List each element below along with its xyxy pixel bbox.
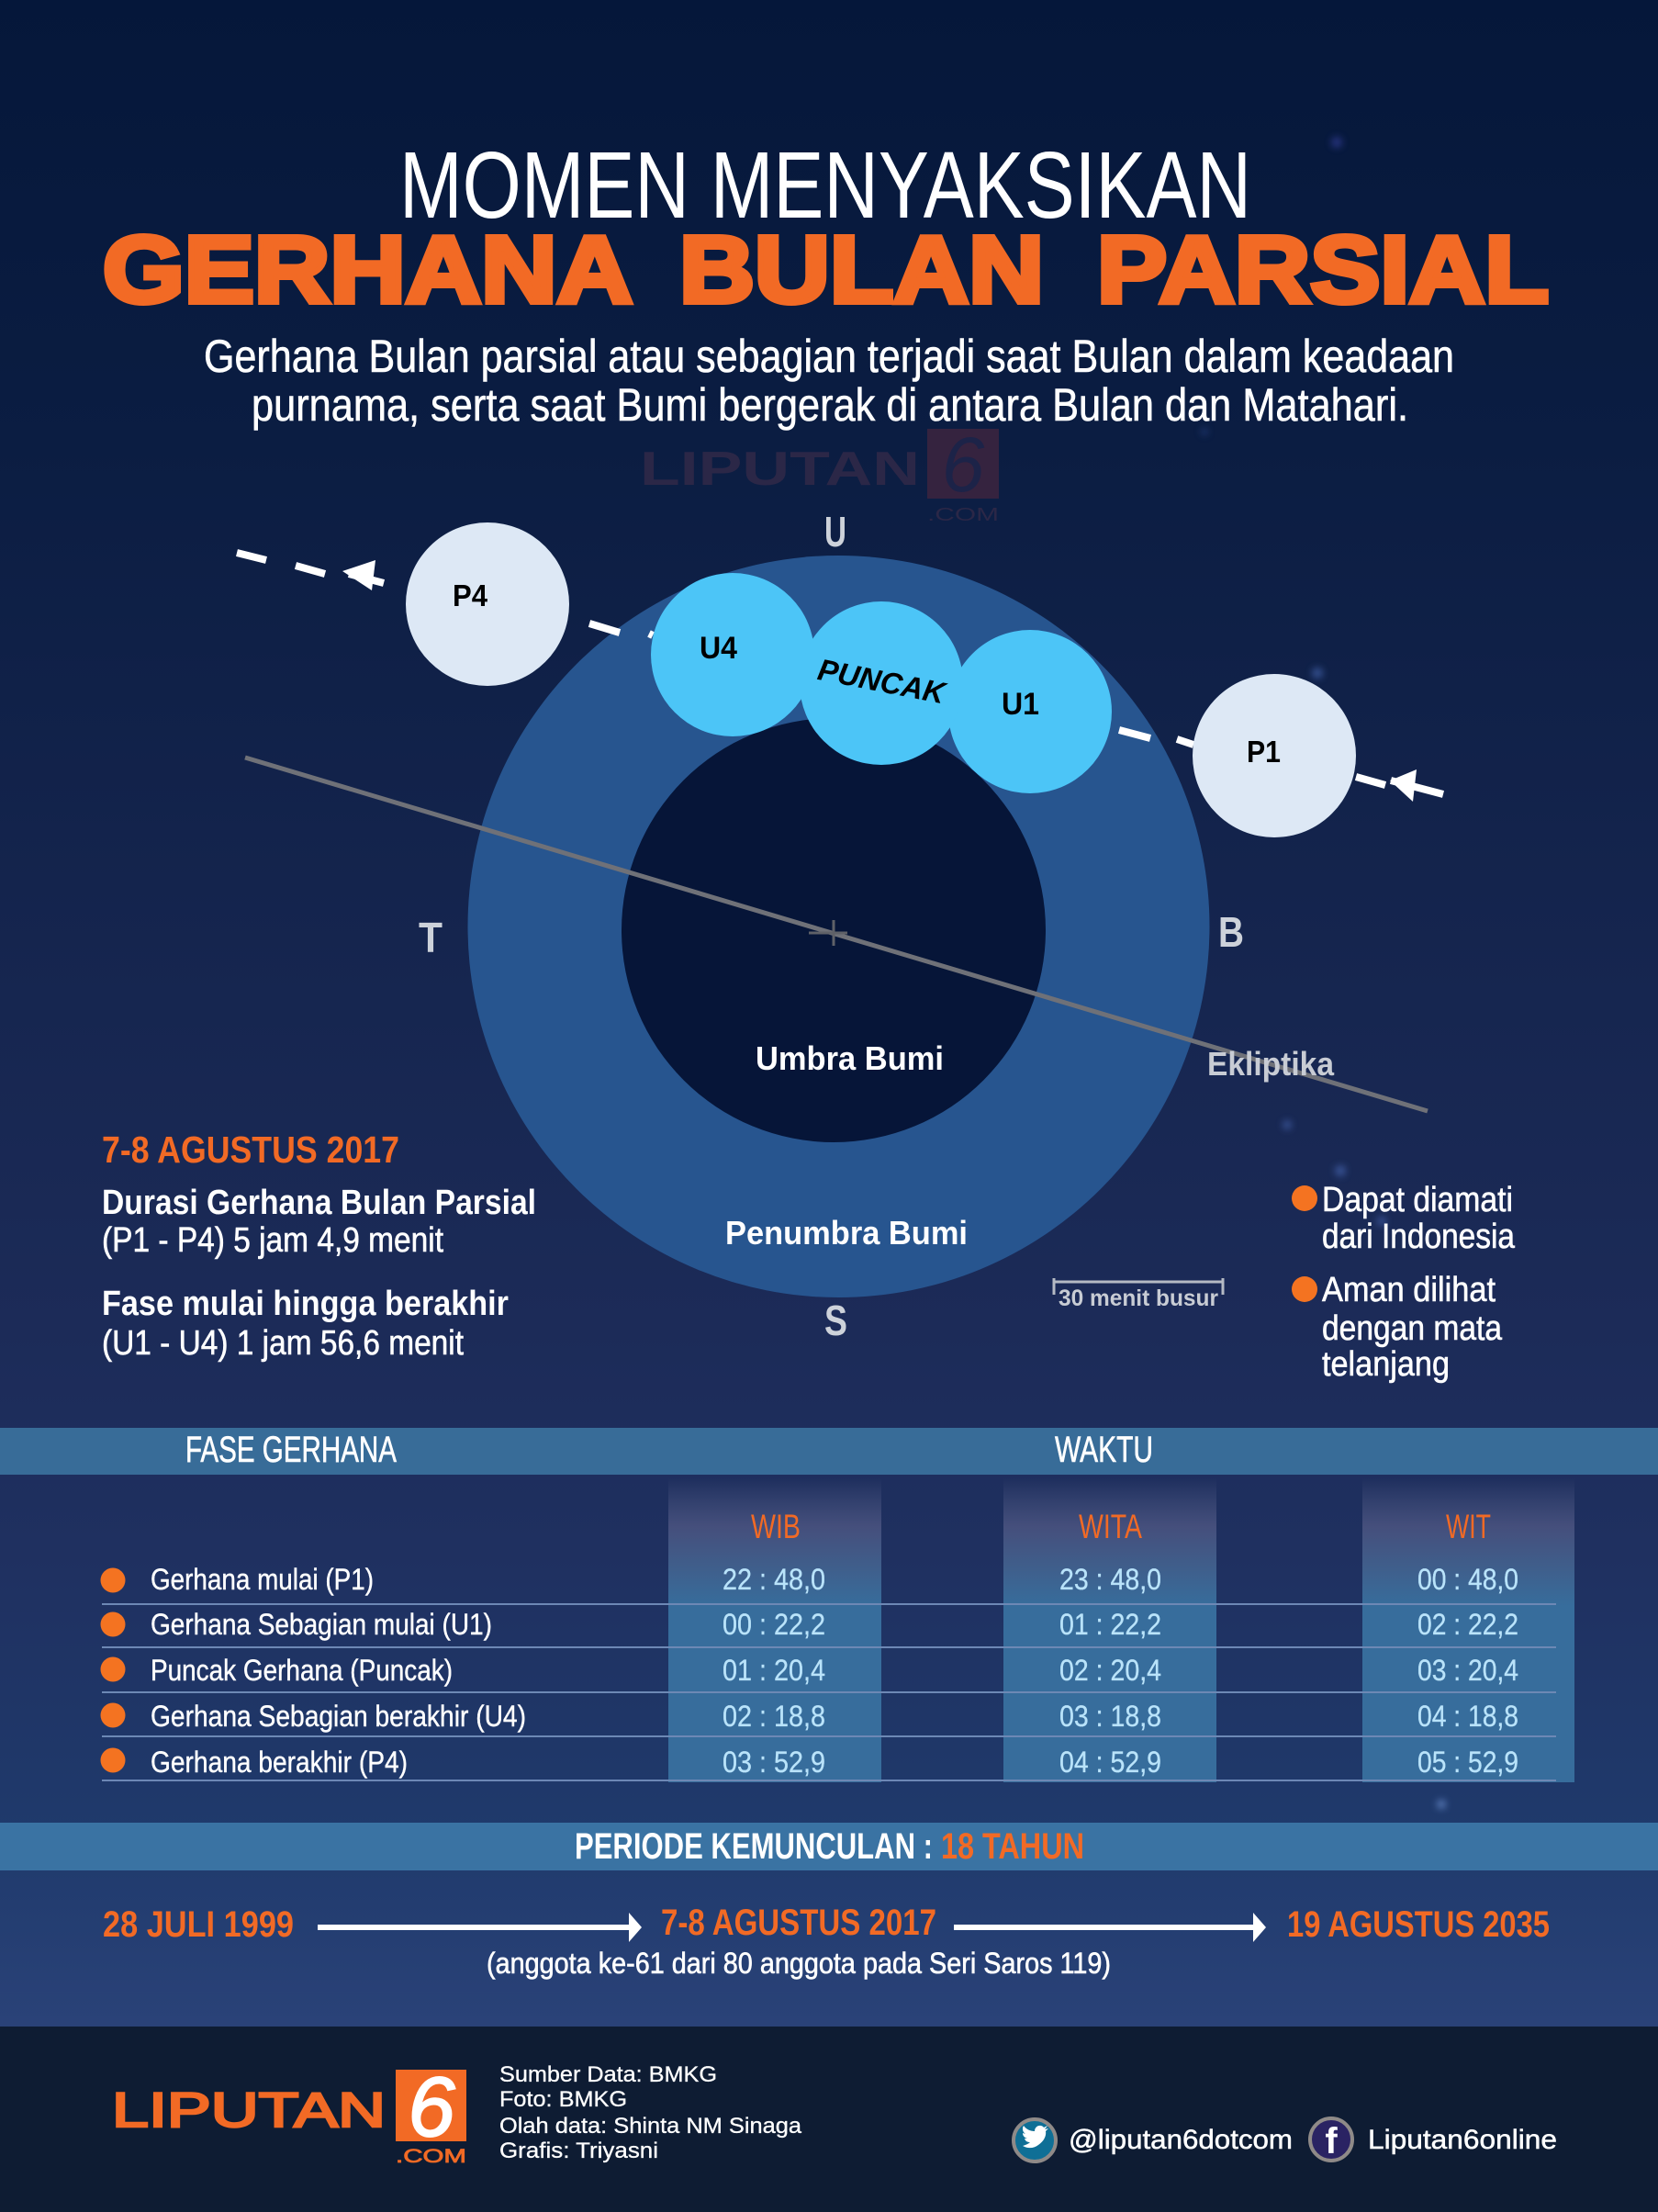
time zone headers — [751, 1508, 1491, 1545]
row: gerhana berakhir: 03 : 52,9 — [723, 1746, 825, 1779]
moon P4: P4 — [453, 578, 488, 612]
title: GERHANA — [103, 217, 633, 322]
row: gerhana mulai: 00 : 48,0 — [1417, 1563, 1518, 1596]
row: gerhana berakhir: 04 : 52,9 — [1059, 1746, 1161, 1779]
title — [103, 132, 1549, 322]
direction letters: S — [824, 1297, 847, 1344]
row: puncak: Puncak Gerhana (Puncak) — [151, 1654, 453, 1687]
viewing notes: Dapat diamati — [1322, 1181, 1513, 1219]
title: PARSIAL — [1097, 217, 1549, 322]
intro text: Gerhana Bulan parsial atau sebagian terjadi saat Bulan dalam keadaan — [204, 331, 1454, 382]
arrow 2 — [954, 1913, 1266, 1942]
time zone headers: WIT — [1446, 1508, 1491, 1545]
period band: PERIODE KEMUNCULAN : — [575, 1826, 933, 1867]
row: gerhana mulai: Gerhana mulai (P1) — [151, 1563, 374, 1596]
intro text: purnama, serta saat Bumi bergerak di antara Bulan dan Matahari. — [252, 379, 1408, 431]
row: sebagian berakhir — [101, 1700, 1518, 1733]
date and duration block: 7-8 AGUSTUS 2017 — [102, 1128, 399, 1171]
scale bar: 30 menit busur — [1059, 1286, 1218, 1311]
period band: 18 TAHUN — [941, 1826, 1084, 1867]
center cross — [809, 920, 847, 946]
row: gerhana berakhir: 05 : 52,9 — [1417, 1746, 1518, 1779]
logo: 6 — [408, 2060, 455, 2154]
intro text — [204, 331, 1454, 431]
penumbra label: Penumbra Bumi — [725, 1214, 968, 1252]
starfield — [1201, 137, 1446, 1809]
row: puncak: 03 : 20,4 — [1417, 1654, 1518, 1687]
period band — [0, 1823, 1658, 1870]
arrow 1 — [318, 1913, 642, 1942]
time zone headers: WIB — [751, 1508, 801, 1545]
row: puncak: 01 : 20,4 — [723, 1654, 825, 1687]
viewing notes: dari Indonesia — [1322, 1218, 1516, 1256]
row: puncak: 02 : 20,4 — [1059, 1654, 1161, 1687]
date and duration block: (U1 - U4) 1 jam 56,6 menit — [102, 1324, 464, 1363]
date and duration block: Fase mulai hingga berakhir — [102, 1285, 509, 1323]
table header band: WAKTU — [1055, 1430, 1153, 1470]
logo: .COM — [396, 2146, 466, 2167]
moon P1: P1 — [1247, 735, 1281, 769]
facebook handle — [1310, 2118, 1557, 2161]
watermark logo: LIPUTAN — [640, 443, 920, 496]
row: gerhana mulai: 22 : 48,0 — [723, 1563, 825, 1596]
viewing notes — [1292, 1181, 1516, 1384]
time zone headers: WITA — [1079, 1508, 1142, 1545]
row: gerhana berakhir: Gerhana berakhir (P4) — [151, 1746, 408, 1779]
moon path dashes and arrows — [237, 553, 1443, 802]
moon P4 — [406, 522, 569, 686]
period timeline: 7-8 AGUSTUS 2017 — [661, 1903, 936, 1943]
credits: Sumber Data: BMKG — [499, 2062, 717, 2087]
direction letters: T — [419, 914, 443, 961]
watermark logo: .COM — [927, 505, 999, 525]
twitter handle — [1014, 2119, 1293, 2161]
eclipse timetable — [101, 1478, 1574, 1782]
row dividers — [102, 1604, 1556, 1780]
moon U4: U4 — [700, 631, 737, 666]
table header band — [0, 1428, 1658, 1475]
direction letters: B — [1218, 908, 1244, 956]
title: MOMEN MENYAKSIKAN — [399, 132, 1251, 238]
watermark logo — [640, 421, 999, 525]
eclipse diagram — [237, 508, 1443, 1344]
ecliptic label: Ekliptika — [1207, 1045, 1335, 1083]
moon P1 — [1193, 674, 1356, 837]
penumbra circle — [468, 556, 1210, 1297]
logo: LIPUTAN — [112, 2083, 386, 2138]
moon U1: U1 — [1002, 687, 1039, 722]
row: sebagian mulai: 02 : 22,2 — [1417, 1608, 1518, 1641]
row: gerhana mulai: 23 : 48,0 — [1059, 1563, 1161, 1596]
ecliptic line — [245, 758, 1428, 1111]
row: sebagian mulai: 01 : 22,2 — [1059, 1608, 1161, 1641]
umbra label: Umbra Bumi — [756, 1039, 944, 1077]
credits: Grafis: Triyasni — [499, 2139, 658, 2163]
moon puncak — [800, 601, 963, 765]
row: sebagian berakhir: 02 : 18,8 — [723, 1700, 825, 1733]
table header band: FASE GERHANA — [185, 1430, 397, 1470]
viewing notes: Aman dilihat — [1322, 1271, 1496, 1309]
time zone columns — [668, 1478, 1574, 1782]
footer — [0, 2027, 1658, 2212]
row: sebagian berakhir: Gerhana Sebagian berakhir (U4) — [151, 1700, 526, 1733]
moon puncak: PUNCAK — [815, 652, 950, 711]
row: sebagian berakhir: 03 : 18,8 — [1059, 1700, 1161, 1733]
period timeline: 19 AGUSTUS 2035 — [1287, 1904, 1550, 1945]
credits: Foto: BMKG — [499, 2087, 627, 2112]
facebook handle: Liputan6online — [1368, 2125, 1557, 2155]
credits — [499, 2062, 802, 2163]
facebook handle: f — [1325, 2121, 1338, 2161]
date and duration block: Durasi Gerhana Bulan Parsial — [102, 1184, 536, 1222]
row: gerhana mulai — [101, 1563, 1518, 1596]
direction letters — [419, 508, 1244, 1344]
moon U4 — [651, 573, 814, 736]
period timeline: (anggota ke-61 dari 80 anggota pada Seri Saros 119) — [487, 1947, 1111, 1980]
direction letters: U — [824, 508, 846, 556]
title: BULAN — [679, 217, 1044, 322]
row: sebagian mulai — [101, 1608, 1518, 1641]
date and duration block: (P1 - P4) 5 jam 4,9 menit — [102, 1221, 443, 1260]
twitter handle: @liputan6dotcom — [1069, 2125, 1293, 2155]
viewing notes: telanjang — [1322, 1345, 1450, 1384]
date and duration block — [102, 1128, 536, 1363]
period timeline — [103, 1903, 1550, 1980]
credits: Olah data: Shinta NM Sinaga — [499, 2114, 802, 2139]
row: sebagian mulai: Gerhana Sebagian mulai (U1) — [151, 1608, 492, 1641]
row: sebagian berakhir: 04 : 18,8 — [1417, 1700, 1518, 1733]
watermark logo: 6 — [942, 421, 985, 508]
logo — [112, 2060, 466, 2167]
row: gerhana berakhir — [101, 1746, 1518, 1779]
row: puncak — [101, 1654, 1518, 1687]
moon U1 — [948, 630, 1112, 793]
viewing notes: dengan mata — [1322, 1309, 1503, 1348]
period timeline: 28 JULI 1999 — [103, 1904, 294, 1945]
row: sebagian mulai: 00 : 22,2 — [723, 1608, 825, 1641]
umbra circle — [622, 718, 1046, 1142]
